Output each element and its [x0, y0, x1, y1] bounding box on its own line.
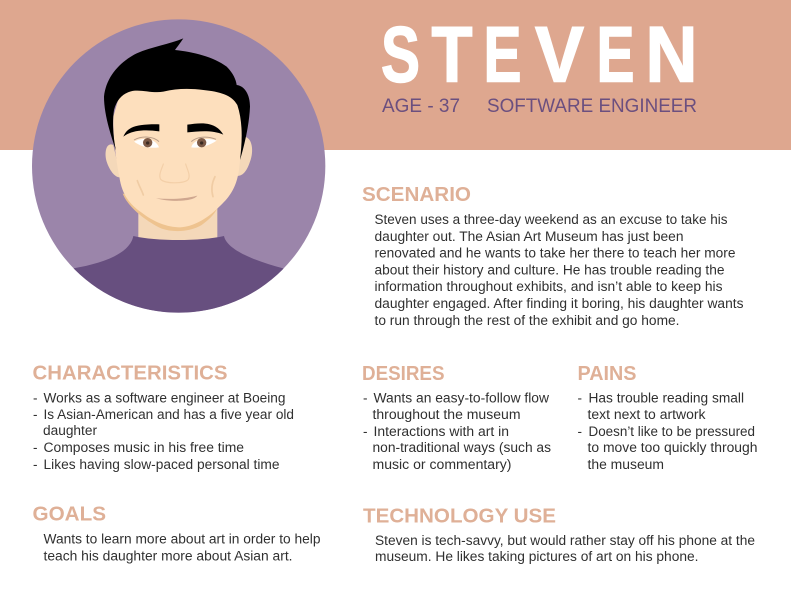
age and occupation: AGE - 37: [382, 96, 460, 117]
heading: scenario: SCENARIO: [362, 183, 471, 206]
desires list: Interactions with art in: [374, 424, 509, 439]
name title: [381, 9, 698, 98]
scenario text: about their history and culture. He has trouble reading the: [374, 262, 724, 278]
characteristics list: Is Asian-American and has a five year old: [44, 407, 294, 422]
technology text: museum. He likes taking pictures of art on his phone.: [375, 549, 698, 564]
panel: scenario: [362, 183, 744, 328]
pains list: [578, 390, 758, 472]
scenario text: daughter engaged. After finding it boring, his daughter wants: [374, 296, 744, 311]
desires list: throughout the museum: [372, 407, 520, 422]
desires list: -: [363, 390, 368, 406]
panel: characteristics: [32, 362, 294, 472]
goals text: Wants to learn more about art in order to help: [44, 532, 320, 546]
icon: cheek lines: [137, 177, 215, 197]
characteristics list: -: [33, 457, 38, 472]
desires list: [363, 390, 551, 472]
pains list: -: [578, 424, 582, 439]
pains list: Doesn’t like to be pressured: [588, 424, 755, 439]
name title: T: [432, 9, 472, 98]
scenario text: Steven uses a three-day weekend as an excuse to take his: [374, 212, 728, 227]
portrait: Steven avatar: [32, 19, 325, 320]
heading: pains: PAINS: [578, 362, 636, 385]
panel: technology use: [363, 504, 755, 564]
panel: pains: [578, 362, 758, 472]
heading: characteristics: CHARACTERISTICS: [32, 362, 228, 384]
icon: face: [113, 82, 243, 227]
desires list: music or commentary): [372, 457, 512, 472]
icon: hair: [104, 38, 250, 160]
characteristics list: -: [33, 407, 38, 422]
icon: eyebrows: [123, 123, 223, 137]
scenario text: to run through the rest of the exhibit and go home.: [374, 313, 680, 328]
name title: E: [484, 9, 522, 98]
name title: E: [596, 9, 634, 98]
icon: ears: [106, 137, 252, 177]
heading: goals: GOALS: [32, 502, 106, 526]
scenario text: information throughout exhibits, and isn’t able to keep his: [374, 279, 723, 294]
heading: desires: DESIRES: [362, 362, 444, 385]
desires list: Wants an easy-to-follow flow: [374, 390, 549, 406]
age and occupation: SOFTWARE ENGINEER: [487, 96, 697, 117]
name title: V: [535, 9, 584, 98]
desires list: non-traditional ways (such as: [372, 440, 551, 455]
characteristics list: Composes music in his free time: [44, 440, 244, 455]
pains list: text next to artwork: [588, 407, 706, 422]
scenario text: daughter out. The Asian Art Museum has just been: [374, 229, 684, 244]
pains list: the museum: [588, 457, 664, 472]
pains list: Has trouble reading small: [588, 390, 744, 406]
goals text: teach his daughter more about Asian art.: [44, 548, 292, 564]
desires list: -: [363, 424, 368, 439]
characteristics list: Likes having slow-paced personal time: [44, 457, 280, 472]
header band: [0, 0, 791, 150]
goals text: [44, 532, 320, 564]
characteristics list: -: [33, 440, 38, 455]
characteristics list: -: [33, 390, 38, 406]
scenario text: [374, 212, 744, 328]
name title: N: [646, 9, 698, 98]
panel: desires: [362, 362, 551, 472]
technology text: Steven is tech-savvy, but would rather stay off his phone at the: [375, 533, 755, 548]
icon: neck: [138, 203, 217, 242]
heading: technology use: TECHNOLOGY USE: [363, 504, 556, 528]
characteristics list: daughter: [43, 423, 98, 438]
icon: eyes: [134, 137, 217, 148]
pains list: to move too quickly through: [588, 440, 758, 455]
scenario text: renovated and he wants to take her there to teach her more: [374, 246, 736, 260]
age and occupation: [382, 96, 697, 117]
panel: goals: [32, 502, 320, 564]
icon: jaw shadow: [123, 193, 217, 231]
characteristics list: [33, 390, 294, 472]
characteristics list: Works as a software engineer at Boeing: [44, 390, 286, 406]
pains list: -: [578, 390, 582, 406]
icon: mouth: [156, 196, 197, 201]
technology text: [375, 533, 755, 564]
icon: sweater: [73, 236, 283, 320]
icon: nose: [160, 164, 189, 183]
name title: S: [381, 9, 420, 98]
